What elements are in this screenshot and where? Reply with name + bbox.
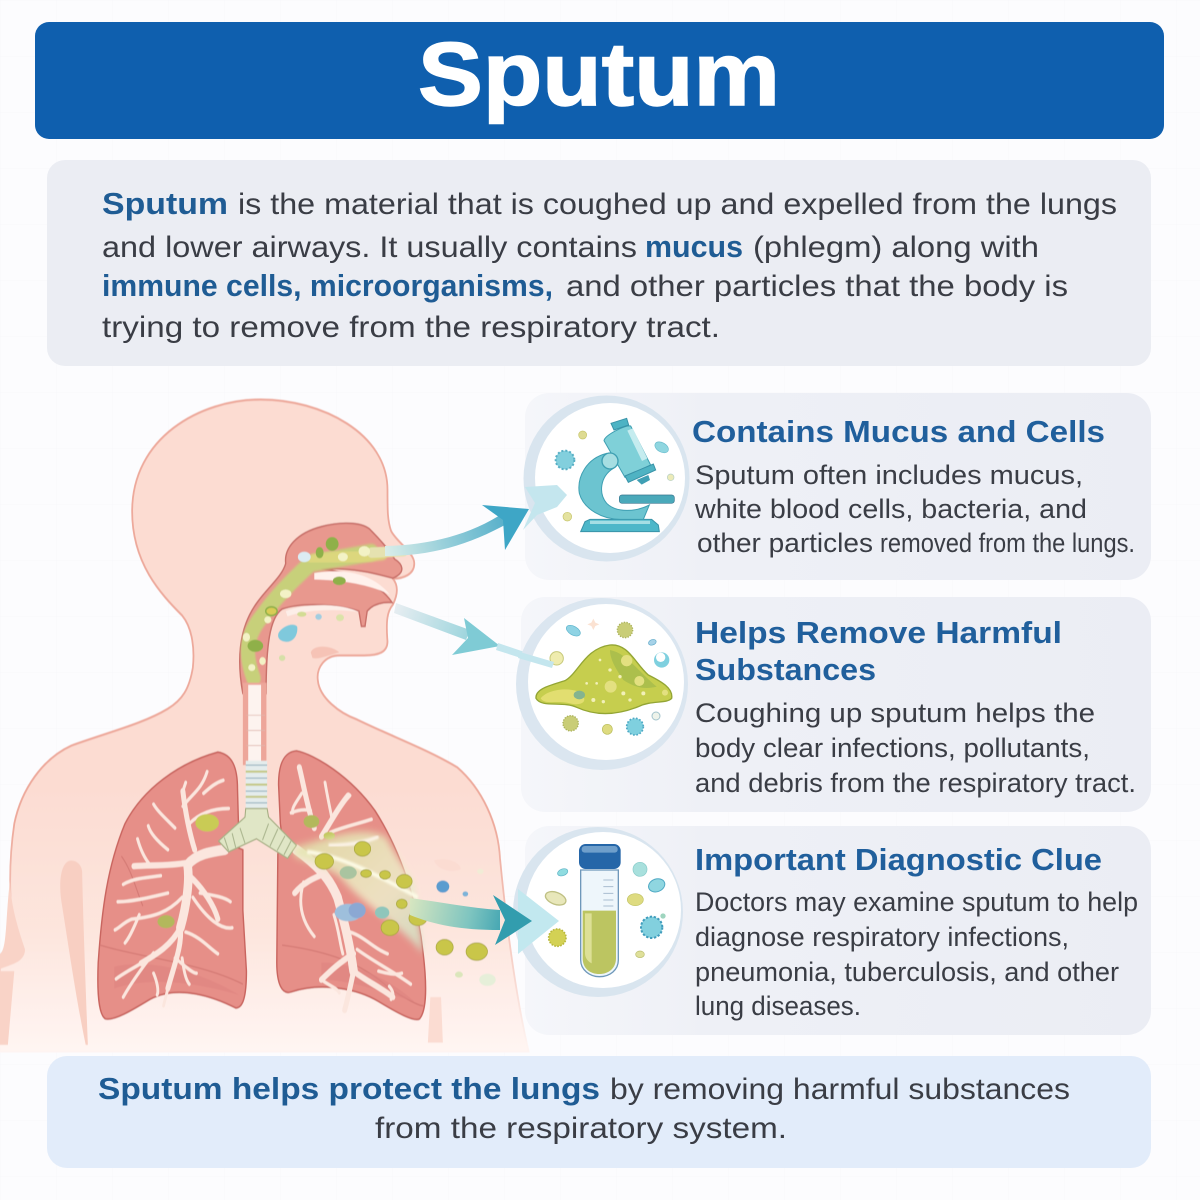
left bronchial tree: [115, 772, 232, 1006]
right lung: [277, 751, 426, 1020]
arrow tip inside microscope circle: [523, 485, 567, 530]
left lung: [98, 752, 246, 1019]
icon: microscope: [524, 396, 690, 562]
title banner: [35, 22, 1164, 139]
text: diagnostic clue: [695, 887, 1138, 1021]
text: diagnostic clue: lung diseases.: [695, 991, 861, 1021]
heading: helps remove: Helps Remove Harmful: [695, 615, 1062, 650]
arm crease: [60, 861, 88, 1045]
text: contains mucus: removed from the lungs.: [880, 528, 1135, 558]
droplets near throat: [278, 612, 344, 661]
mucus stream in right lung: [293, 832, 496, 986]
arrow tail inside blob circle: [518, 652, 554, 668]
icon: test tube: [513, 827, 683, 997]
text: helps remove: body clear infections, pollutants,: [695, 733, 1090, 763]
text: contains mucus: white blood cells, bacteria, and: [694, 494, 1087, 524]
arrow: from nose to mucus panel: [385, 505, 529, 556]
panel: definition: is the material that is coughed up and expelled from the lungs: [238, 188, 1117, 221]
panel: definition: and lower airways. It usually contains: [102, 231, 637, 264]
panel: definition: immune cells, microorganisms,: [102, 268, 553, 303]
panel: contains mucus and cells: [525, 393, 1151, 580]
panel: helps remove harmful substances: [521, 597, 1151, 812]
text: contains mucus: other particles: [697, 528, 873, 558]
panel: definition: mucus: [645, 229, 743, 264]
text: helps remove: Coughing up sputum helps the: [695, 698, 1095, 728]
mucus in airway: [248, 553, 371, 678]
panel: definition: and other particles that the body is: [566, 270, 1068, 303]
right bronchial tree: [291, 767, 411, 1010]
title: Sputum: [418, 25, 780, 125]
text: diagnostic clue: Doctors may examine sputum to help: [695, 887, 1138, 917]
trachea: [243, 683, 267, 808]
body silhouette: [0, 400, 529, 1051]
illustration: human respiratory system: [0, 400, 529, 1051]
icon: sputum blob: [516, 598, 688, 770]
panel: definition: trying to remove from the respiratory tract.: [102, 311, 720, 344]
callout: summary: [47, 1056, 1151, 1168]
text: contains mucus: Sputum often includes mucus,: [695, 460, 1083, 490]
heading: diagnostic clue: Important Diagnostic Clue: [695, 842, 1102, 877]
text: helps remove: [695, 698, 1136, 798]
text: diagnostic clue: diagnose respiratory infections,: [695, 922, 1069, 952]
callout: summary: from the respiratory system.: [375, 1112, 787, 1145]
left side shoulder shading: [0, 880, 25, 1045]
arrow: from lung to diagnostic panel: [410, 898, 500, 930]
arrow head at test tube circle: [493, 889, 559, 954]
text: diagnostic clue: pneumonia, tuberculosis, and other: [695, 957, 1119, 987]
heading: helps remove: [695, 615, 1062, 687]
callout: summary: by removing harmful substances: [610, 1073, 1070, 1106]
panel: definition: [47, 160, 1151, 366]
arrow: from mouth to harmful substances panel: [394, 603, 554, 668]
panel: definition: (phlegm) along with: [753, 231, 1039, 264]
panel: definition: Sputum: [102, 186, 228, 221]
text: contains mucus: [694, 460, 1135, 558]
callout: summary: Sputum helps protect the lungs: [98, 1071, 600, 1106]
text: helps remove: and debris from the respiratory tract.: [695, 768, 1136, 798]
airway: nasal cavity and throat: [240, 523, 404, 694]
heading: contains mucus: Contains Mucus and Cells: [692, 414, 1105, 449]
panel: important diagnostic clue: [525, 826, 1151, 1035]
heading: helps remove: Substances: [695, 652, 876, 687]
bronchi: [219, 808, 296, 858]
